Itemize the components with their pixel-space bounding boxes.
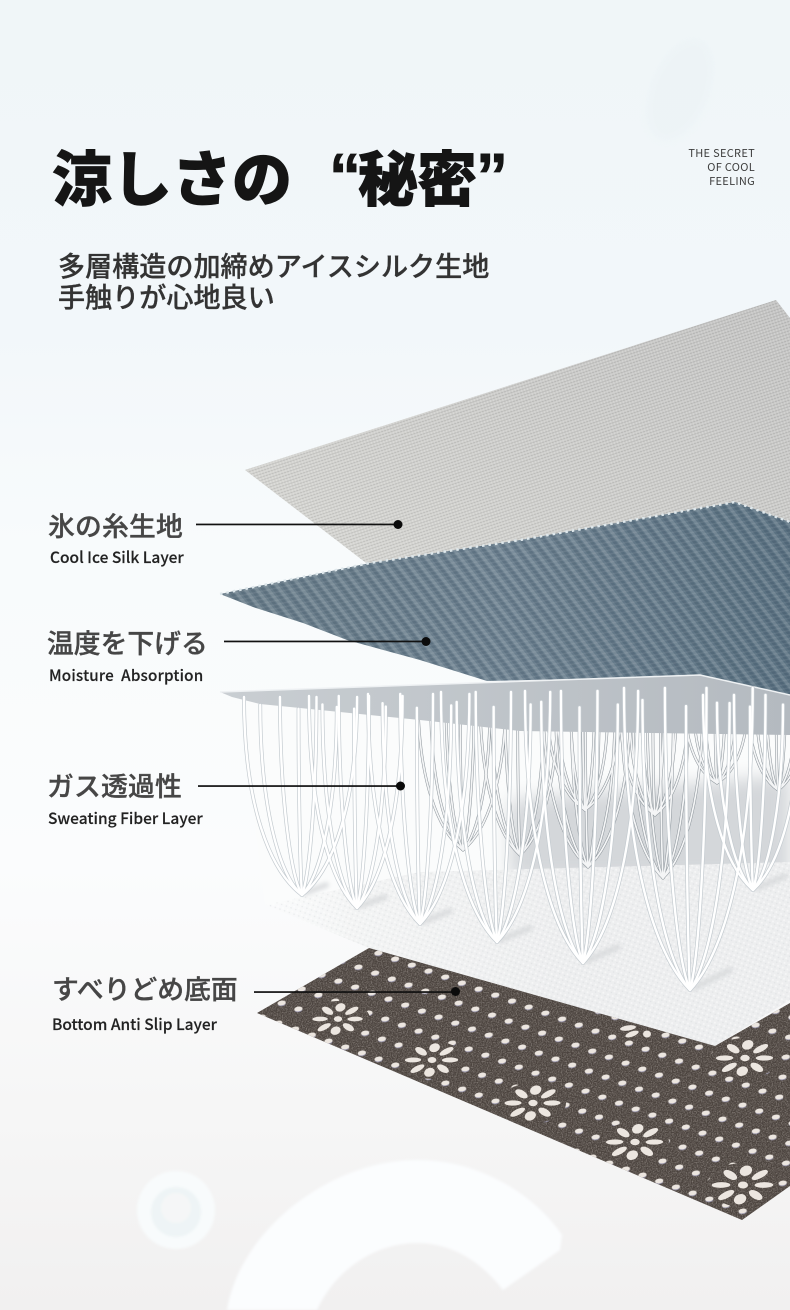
corner caption: FEELING [709,173,755,189]
decoration: small ice ring [137,1171,215,1249]
corner caption: OF COOL [707,159,755,175]
decoration: large ice ring [227,1160,562,1310]
label: ice silk: Cool Ice Silk Layer [50,546,184,568]
title: “ [329,140,361,212]
subtitle: 多層構造の加締めアイスシルク生地 [58,245,489,284]
callout line: cool ice silk layer [196,520,402,529]
layer: bottom anti-slip mat [250,940,790,1225]
layer: white base sheet [265,862,790,1046]
title: 秘密 [358,132,476,219]
callout line: bottom anti-slip layer [254,987,460,996]
fibers: contact shadows on sheet [305,876,785,988]
title: ” [476,140,508,212]
fibers: front bundles [244,688,790,990]
flower patterns on mat [309,1003,777,1204]
label: ice silk [48,505,184,568]
title [52,132,508,219]
layer: moisture absorption fabric [220,502,790,695]
label: breathable fiber [47,765,203,829]
label: anti-slip: すべりどめ底面 [52,968,238,1007]
label: ice silk: 氷の糸生地 [48,505,183,544]
label: breathable fiber: Sweating Fiber Layer [48,807,203,829]
label: anti-slip: Bottom Anti Slip Layer [52,1013,217,1035]
label: breathable fiber: ガス透過性 [47,765,182,804]
callout line: moisture absorption [224,637,430,646]
callout line: sweating fiber layer [198,782,405,790]
fibers: rear bundles [418,695,790,878]
label: moisture [47,622,208,686]
title: 涼しさの [52,132,292,219]
layer: cool ice silk fabric [245,300,790,566]
corner caption [688,145,755,189]
corner caption: THE SECRET [688,145,755,161]
layer: grey fiber top plate [220,675,790,735]
subtitle: 手触りが心地良い [58,276,275,315]
label: anti-slip [52,968,238,1035]
subtitle [58,245,489,315]
label: moisture: Moisture Absorption [49,664,203,686]
label: moisture: 温度を下げる [47,622,208,661]
layer: white backing behind fibers [240,700,790,905]
